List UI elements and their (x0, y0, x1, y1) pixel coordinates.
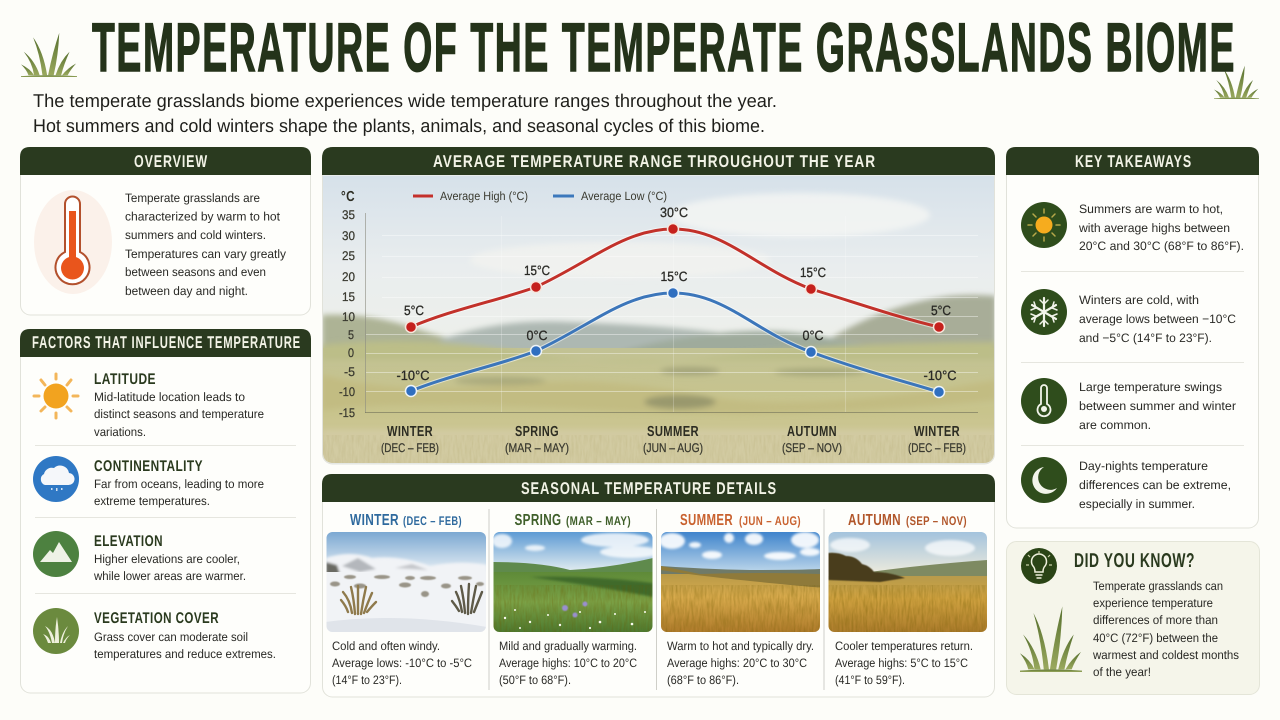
data labels: 15°C (800, 265, 826, 280)
season: autumn (828, 512, 988, 687)
season: winter (326, 512, 487, 687)
data labels: 15°C (660, 269, 688, 284)
intro text (33, 90, 777, 136)
y axis labels: 20 (342, 270, 355, 284)
panel: seasonal details (322, 474, 995, 697)
day-night text: differences can be extreme, (1079, 478, 1231, 492)
vegetation text: temperatures and reduce extremes. (94, 647, 276, 661)
overview text: between day and night. (125, 284, 248, 298)
data labels: 0°C (802, 328, 824, 343)
line: average high (406, 224, 944, 332)
autumn title: AUTUMN (848, 512, 901, 529)
panel: overview (20, 147, 311, 315)
did you know text: 40°C (72°F) between the (1093, 631, 1218, 645)
autumn text: (41°F to 59°F). (835, 673, 905, 687)
overview text: summers and cold winters. (125, 228, 266, 242)
swings text: between summer and winter (1079, 399, 1236, 413)
spring title: SPRING (514, 512, 562, 529)
panel: factors (20, 329, 311, 693)
heading: factors: FACTORS THAT INFLUENCE TEMPERATURE (32, 333, 301, 352)
winter text (332, 639, 472, 687)
season: summer (659, 512, 822, 687)
y axis labels: 30 (342, 229, 355, 243)
x axis labels: (SEP – NOV) (782, 441, 842, 455)
icon: sun (34, 374, 78, 418)
continentality text: Far from oceans, leading to more (94, 477, 264, 491)
spring text: Mild and gradually warming. (499, 639, 637, 653)
winters text: Winters are cold, with (1079, 293, 1199, 307)
summers text: 20°C and 30°C (68°F to 86°F). (1079, 239, 1244, 253)
intro text: Hot summers and cold winters shape the plants, animals, and seasonal cycles of this biome. (33, 115, 765, 136)
summer title (680, 512, 801, 529)
icon: grass tuft (1020, 606, 1082, 672)
swings text: Large temperature swings (1079, 380, 1222, 394)
heading: vegetation cover: VEGETATION COVER (94, 610, 219, 627)
factor: latitude (34, 371, 264, 439)
icon: moon badge (1021, 457, 1067, 503)
summer text: Warm to hot and typically dry. (667, 639, 814, 653)
data labels: 15°C (524, 263, 550, 278)
heading: seasonal: SEASONAL TEMPERATURE DETAILS (521, 479, 777, 498)
x axis labels: (DEC – FEB) (381, 441, 439, 455)
icon: grass top left (21, 33, 77, 77)
y axis labels: -5 (344, 365, 355, 379)
icon: grass top right (1214, 66, 1259, 99)
takeaway: winters (1021, 289, 1236, 345)
summer title: (JUN – AUG) (739, 514, 801, 528)
icon: thermometer (34, 190, 112, 294)
y axis labels: -15 (339, 406, 355, 420)
did you know text: of the year! (1093, 665, 1151, 679)
overview text: Temperatures can vary greatly (125, 247, 287, 261)
line: average low (406, 288, 944, 398)
factor: elevation (33, 531, 246, 583)
heading: chart: AVERAGE TEMPERATURE RANGE THROUGHOUT THE YEAR (433, 152, 876, 171)
winter title (350, 512, 462, 529)
vegetation text: Grass cover can moderate soil (94, 630, 248, 644)
latitude text: Mid-latitude location leads to (94, 390, 245, 404)
y axis labels: 10 (342, 310, 355, 324)
heading: key takeaways: KEY TAKEAWAYS (1075, 152, 1192, 171)
autumn text: Cooler temperatures return. (835, 639, 973, 653)
y axis labels: 25 (342, 249, 355, 263)
factor: continentality (33, 456, 264, 508)
elevation text: while lower areas are warmer. (93, 569, 246, 583)
continentality text: extreme temperatures. (94, 494, 210, 508)
x axis labels: (JUN – AUG) (643, 441, 703, 455)
data labels: -10°C (396, 368, 430, 383)
winter title: WINTER (350, 512, 399, 529)
did you know text: Temperate grasslands can (1093, 579, 1223, 593)
legend (413, 189, 667, 203)
season: spring (492, 512, 660, 687)
autumn title (848, 512, 967, 529)
did you know text: experience temperature (1093, 596, 1213, 610)
chart landscape background (322, 176, 996, 464)
summer title: SUMMER (680, 512, 733, 529)
did you know text (1092, 579, 1239, 679)
y axis labels: 0 (348, 346, 354, 360)
y axis labels (339, 189, 355, 420)
heading: latitude: LATITUDE (94, 371, 156, 388)
day-night text (1079, 459, 1231, 511)
summer photo (659, 532, 822, 632)
takeaway: swings (1021, 378, 1236, 432)
summer text: (68°F to 86°F). (667, 673, 739, 687)
grass tufts (341, 584, 482, 614)
x axis labels: SUMMER (647, 424, 699, 440)
heading: overview: OVERVIEW (134, 152, 208, 171)
x axis labels: (MAR – MAY) (505, 441, 569, 455)
takeaway: day-night (1021, 457, 1231, 511)
autumn title: (SEP – NOV) (906, 514, 967, 528)
heading: continentality: CONTINENTALITY (94, 458, 203, 475)
did you know text: warmest and coldest months (1092, 648, 1239, 662)
x axis labels: AUTUMN (787, 424, 837, 440)
y axis labels: 5 (348, 328, 354, 342)
day-night text: Day-nights temperature (1079, 459, 1208, 473)
winter text: (14°F to 23°F). (332, 673, 402, 687)
heading: did you know: DID YOU KNOW? (1074, 550, 1195, 572)
takeaway: summers (1021, 202, 1244, 253)
winter photo (326, 532, 487, 632)
overview text: characterized by warm to hot (125, 210, 281, 224)
spring title (514, 512, 631, 529)
intro text: The temperate grasslands biome experiences wide temperature ranges throughout the year. (33, 90, 777, 111)
winter text: Average lows: -10°C to -5°C (332, 656, 472, 670)
autumn text: Average highs: 5°C to 15°C (835, 656, 968, 670)
winter title: (DEC – FEB) (403, 514, 462, 528)
spring title: (MAR – MAY) (566, 514, 631, 528)
legend: Average Low (°C) (581, 189, 667, 203)
data labels: 30°C (660, 205, 688, 220)
overview text (125, 191, 287, 298)
data labels (396, 205, 957, 383)
day-night text: especially in summer. (1079, 497, 1195, 511)
data labels: -10°C (924, 368, 957, 383)
winters text (1079, 293, 1236, 345)
winters text: and −5°C (14°F to 23°F). (1079, 331, 1212, 345)
data labels: 5°C (404, 303, 424, 318)
y axis labels: °C (341, 189, 355, 205)
winter text: Cold and often windy. (332, 639, 440, 653)
swings text (1079, 380, 1236, 432)
latitude text: variations. (94, 425, 146, 439)
overview text: Temperate grasslands are (125, 191, 260, 205)
summer text: Average highs: 20°C to 30°C (667, 656, 807, 670)
x axis labels: WINTER (914, 424, 960, 440)
overview text: between seasons and even (125, 265, 266, 279)
elevation text (93, 552, 246, 583)
icon: sun badge (1021, 202, 1067, 248)
x axis labels: (DEC – FEB) (908, 441, 966, 455)
spring photo (492, 532, 660, 632)
panel: key takeaways (1006, 147, 1259, 528)
data labels: 5°C (931, 303, 951, 318)
vegetation text (94, 630, 276, 661)
continentality text (94, 477, 264, 508)
spring text (499, 639, 637, 687)
icon: grass circle (33, 608, 79, 654)
icon: mountain (33, 531, 79, 577)
x axis labels (381, 424, 966, 455)
swings text: are common. (1079, 418, 1151, 432)
spring text: (50°F to 68°F). (499, 673, 571, 687)
icon: thermometer badge (1021, 378, 1067, 424)
heading: elevation: ELEVATION (94, 533, 163, 550)
summers text (1078, 202, 1244, 253)
winters text: average lows between −10°C (1079, 312, 1236, 326)
spring text: Average highs: 10°C to 20°C (499, 656, 637, 670)
legend: Average High (°C) (440, 189, 528, 203)
latitude text: distinct seasons and temperature (94, 407, 264, 421)
autumn text (835, 639, 973, 687)
data labels: 0°C (526, 328, 548, 343)
icon: snowflake badge (1021, 289, 1067, 335)
x axis labels: SPRING (515, 424, 559, 440)
icon: cloud (33, 456, 79, 502)
summers text: Summers are warm to hot, (1079, 202, 1223, 216)
panel: temperature chart (322, 147, 996, 464)
x axis labels: WINTER (387, 424, 433, 440)
elevation text: Higher elevations are cooler, (94, 552, 240, 566)
did you know text: differences of more than (1093, 613, 1218, 627)
latitude text (94, 390, 264, 439)
summer text (667, 639, 814, 687)
summers text: with average highs between (1078, 221, 1230, 235)
y axis labels: 35 (342, 208, 355, 222)
panel: did you know (1006, 542, 1260, 694)
chart grid and axes (365, 213, 978, 413)
autumn photo (828, 532, 988, 632)
y axis labels: -10 (339, 385, 355, 399)
factor: vegetation cover (33, 608, 276, 661)
icon: light bulb badge (1021, 548, 1057, 584)
y axis labels: 15 (342, 290, 355, 304)
